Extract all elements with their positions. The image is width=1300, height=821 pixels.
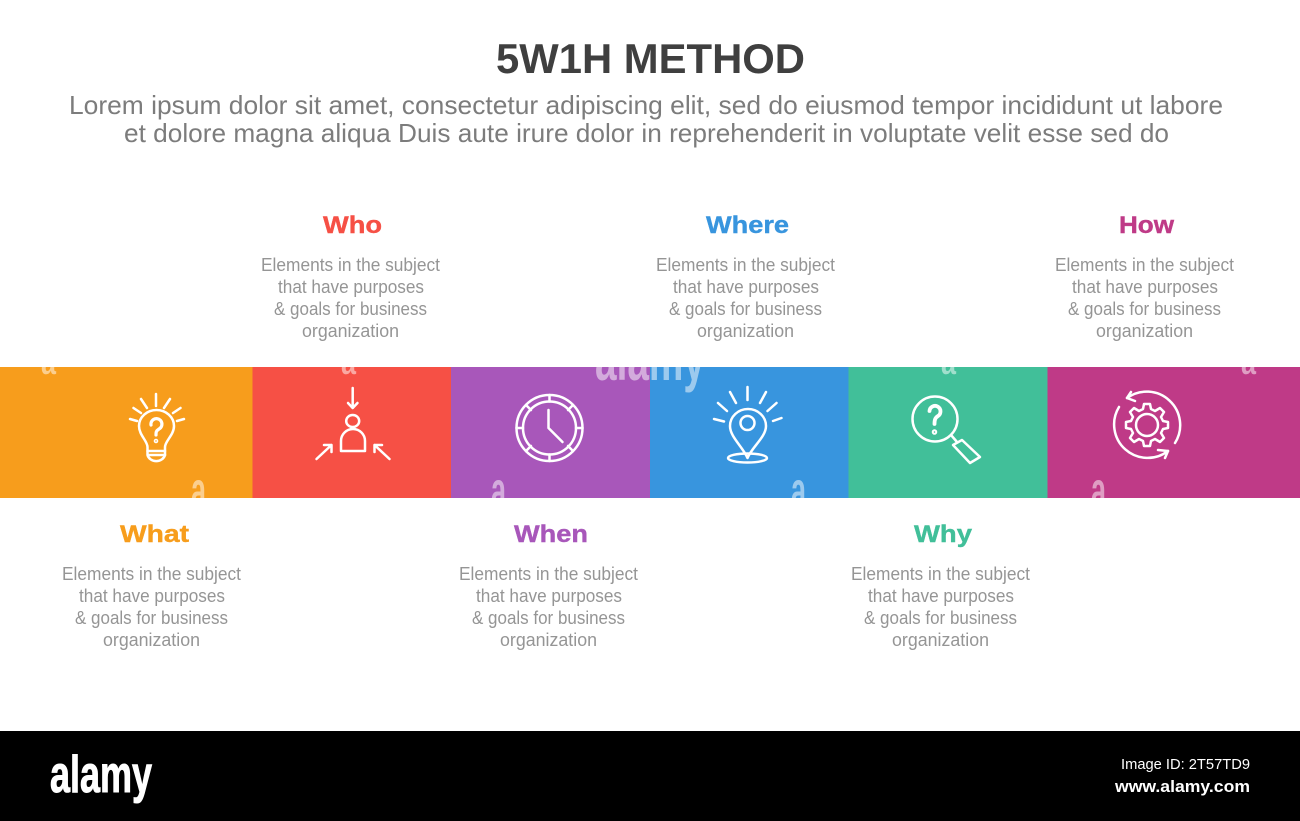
panel: what: organization [103,630,200,650]
subtitle text: et dolore magna aliqua Duis aute irure dolor in reprehenderit in voluptate velit esse sed do [124,118,1169,148]
panel: how: that have purposes [1072,277,1218,297]
colour band: a [191,462,207,520]
icon: map pin with rays [714,387,782,462]
footer bar [0,731,1300,821]
colour band: a [491,462,507,520]
icon: light bulb with question mark [130,394,184,461]
panel: when: organization [500,630,597,650]
colour band: a [791,462,807,520]
panel: where: & goals for business [669,299,822,319]
panel: why: that have purposes [868,586,1014,606]
subtitle text: Lorem ipsum dolor sit amet, consectetur adipiscing elit, sed do eiusmod tempor incididunt ut labore [69,90,1223,120]
panel: who: & goals for business [274,299,427,319]
panel: why: Elements in the subject [851,564,1030,584]
subtitle text [69,90,1223,148]
colour band: a [41,344,57,382]
colour band: a [1091,462,1107,520]
title: 5W1H METHOD [496,35,805,82]
icon: person with arrows [316,388,390,459]
panel: where: Where [706,212,789,239]
panel: when: Elements in the subject [459,564,638,584]
panel: what: What [120,521,189,548]
panel: where: that have purposes [673,277,819,297]
panel: what [62,521,241,650]
footer image id: Image ID: 2T57TD9 [1121,756,1250,773]
colour band: a [1241,344,1257,382]
icon: gear with circular arrows [1114,392,1180,458]
panel: when: that have purposes [476,586,622,606]
panel: where: organization [697,321,794,341]
panel: when [459,521,638,650]
icon: magnifier with question mark [912,396,980,463]
panel: how: & goals for business [1068,299,1221,319]
panel: what: Elements in the subject [62,564,241,584]
panel: what: that have purposes [79,586,225,606]
panel: how: organization [1096,321,1193,341]
panel: why: Why [914,521,973,548]
panel: when: & goals for business [472,608,625,628]
colour band [0,367,1300,498]
panel: where [656,212,835,341]
panel: what: & goals for business [75,608,228,628]
colour band: alamy [595,326,705,393]
icon: clock [516,395,582,461]
panel: why: organization [892,630,989,650]
colour band: a [341,344,357,382]
panel: who: that have purposes [278,277,424,297]
panel: why: & goals for business [864,608,1017,628]
panel: why [851,521,1030,650]
panel: who: organization [302,321,399,341]
panel: when: When [514,521,588,548]
footer logo: alamy [50,746,152,804]
panel: where: Elements in the subject [656,255,835,275]
panel: who: Who [323,212,382,239]
panel: who: Elements in the subject [261,255,440,275]
footer url: www.alamy.com [1114,777,1250,796]
panel: how [1055,212,1234,341]
panel: how: Elements in the subject [1055,255,1234,275]
panel: who [261,212,440,341]
colour band: a [941,344,957,382]
panel: how: How [1119,212,1174,239]
